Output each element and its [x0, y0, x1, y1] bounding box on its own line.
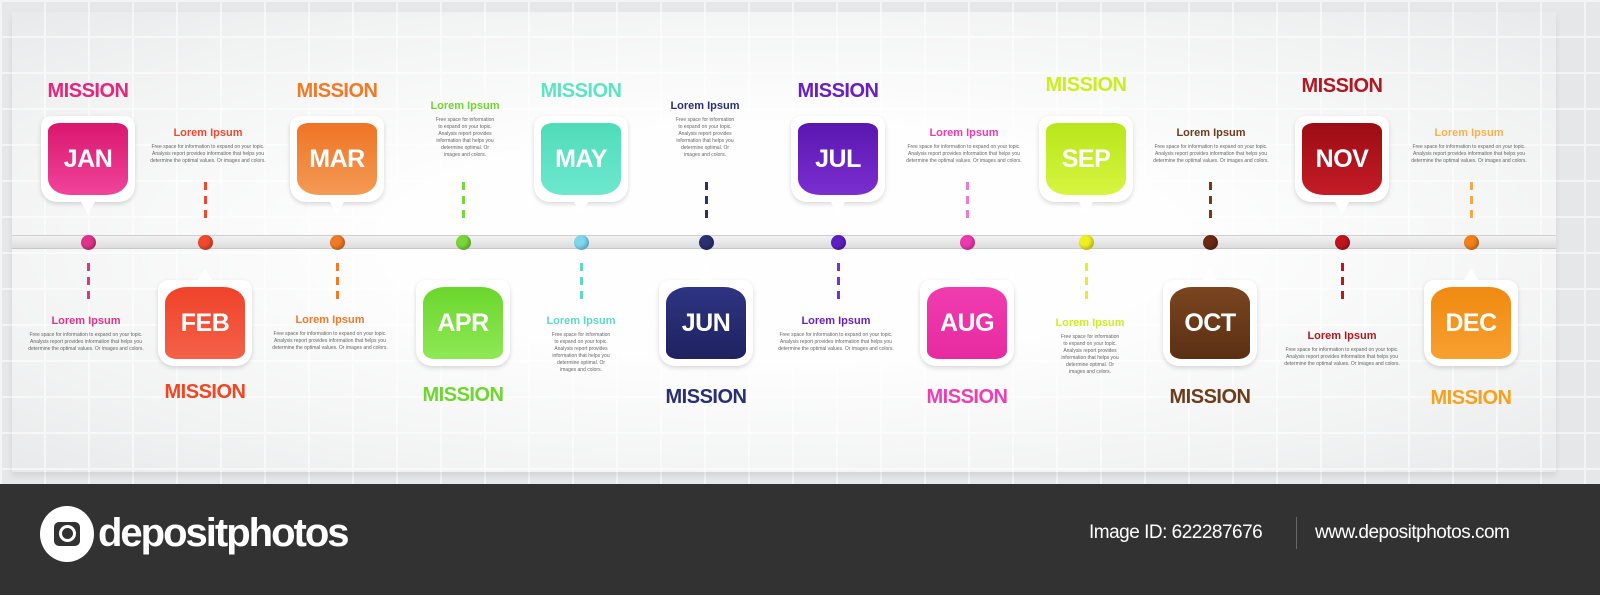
card: OCT: [1163, 280, 1257, 366]
dot: NOV: [1335, 235, 1350, 250]
text: SEP: Lorem Ipsum: [1055, 317, 1125, 329]
heading: MAR mission: MISSION: [297, 80, 377, 102]
dot: DEC: [1464, 235, 1479, 250]
heading: NOV mission: MISSION: [1302, 75, 1382, 97]
dash: JUN: [705, 182, 708, 222]
dot: FEB: [198, 235, 213, 250]
milestone: APR: [414, 284, 512, 406]
card: FEB: [158, 280, 252, 366]
card: OCT: OCT: [1184, 308, 1236, 336]
dot: SEP: [1079, 235, 1094, 250]
card: SEP: SEP: [1062, 144, 1110, 172]
text: AUG: Lorem Ipsum: [929, 127, 999, 139]
text: NOV: [1284, 330, 1400, 367]
milestone: JUN: [658, 284, 754, 408]
card: APR: APR: [437, 308, 489, 336]
text: JUL: [778, 315, 894, 352]
text: JUL: Free space for information to expand on your topic. Analysis report provides information that helps you determine the optimal values. Or images and colors.: [778, 332, 894, 352]
dash: FEB: [204, 182, 207, 222]
text: JUL: Lorem Ipsum: [801, 315, 871, 327]
heading: SEP mission: MISSION: [1046, 74, 1126, 96]
heading: APR mission: MISSION: [423, 384, 503, 406]
text: OCT: [1153, 127, 1269, 164]
card: JAN: JAN: [64, 144, 112, 172]
heading: MAY mission: MISSION: [541, 80, 621, 102]
timeline line: [12, 235, 1556, 249]
dash: JUL: [837, 263, 840, 303]
card: MAY: [534, 116, 628, 202]
milestone: DEC: [1422, 269, 1520, 409]
card: MAR: [290, 116, 384, 202]
text: MAY: Free space for information to expand on your topic. Analysis report provides information that helps you determine optimal. Or images and colors.: [552, 332, 610, 373]
heading: FEB mission: MISSION: [165, 381, 245, 403]
card: APR: [416, 280, 510, 366]
dot: MAR: [330, 235, 345, 250]
dot: APR: [456, 235, 471, 250]
dash: MAR: [336, 263, 339, 303]
text: MAY: Lorem Ipsum: [546, 315, 616, 327]
card: AUG: AUG: [940, 308, 994, 336]
text: SEP: Free space for information to expand on your topic. Analysis report provides information that helps you determine optimal. Or images and colors.: [1061, 334, 1119, 375]
dot: MAY: [574, 235, 589, 250]
text: JUN: [670, 100, 740, 158]
text: NOV: Lorem Ipsum: [1307, 330, 1377, 342]
dash: JAN: [87, 263, 90, 303]
text: AUG: [906, 127, 1022, 164]
dash: SEP: [1085, 263, 1088, 303]
text: FEB: [150, 127, 266, 164]
card: MAR: MAR: [309, 144, 365, 172]
dot: JUN: [699, 235, 714, 250]
text: JAN: Free space for information to expand on your topic. Analysis report provides information that helps you determine the optimal values. Or images and colors.: [28, 332, 144, 352]
text: DEC: Lorem Ipsum: [1434, 127, 1504, 139]
text: APR: [430, 100, 500, 158]
heading: AUG mission: MISSION: [927, 386, 1007, 408]
dot: OCT: [1203, 235, 1218, 250]
card: SEP: [1039, 116, 1133, 202]
dash: AUG: [966, 182, 969, 222]
card: NOV: [1295, 116, 1389, 202]
text: MAR: Free space for information to expand on your topic. Analysis report provides information that helps you determine the optimal values. Or images and colors.: [272, 331, 388, 351]
card: JUL: [791, 116, 885, 202]
dash: OCT: [1209, 182, 1212, 222]
milestone: JUL: [790, 80, 886, 206]
dot: JUL: [831, 235, 846, 250]
dash: DEC: [1470, 182, 1473, 222]
dash: NOV: [1341, 263, 1344, 303]
logo text: depositphotos: [98, 511, 348, 555]
card: AUG: [920, 280, 1014, 366]
card: DEC: DEC: [1445, 308, 1497, 336]
text: JAN: Lorem Ipsum: [51, 315, 121, 327]
heading: JUL mission: MISSION: [798, 80, 878, 102]
text: JUN: Free space for information to expand on your topic. Analysis report provides information that helps you determine optimal. Or images and colors.: [676, 117, 734, 158]
text: MAR: Lorem Ipsum: [295, 314, 365, 326]
dot: JAN: [81, 235, 96, 250]
text: JUN: Lorem Ipsum: [670, 100, 740, 112]
icon: camera: [40, 506, 94, 562]
milestone: NOV: [1294, 75, 1390, 206]
text: FEB: Lorem Ipsum: [173, 127, 243, 139]
card: FEB: FEB: [181, 308, 229, 336]
text: OCT: Lorem Ipsum: [1176, 127, 1246, 139]
card: JUL: JUL: [815, 144, 861, 172]
card: JAN: [41, 116, 135, 202]
text: DEC: [1411, 127, 1527, 164]
text: NOV: Free space for information to expand on your topic. Analysis report provides information that helps you determine the optimal values. Or images and colors.: [1284, 347, 1400, 367]
heading: JAN mission: MISSION: [48, 80, 128, 102]
milestone: MAY: [532, 80, 630, 206]
text: OCT: Free space for information to expand on your topic. Analysis report provides information that helps you determine the optimal values. Or images and colors.: [1153, 144, 1269, 164]
card: JUN: [659, 280, 753, 366]
heading: OCT mission: MISSION: [1170, 386, 1250, 408]
text: AUG: Free space for information to expand on your topic. Analysis report provides information that helps you determine the optimal values. Or images and colors.: [906, 144, 1022, 164]
text: MAR: [272, 314, 388, 351]
text: JAN: [28, 315, 144, 352]
heading: DEC mission: MISSION: [1431, 387, 1511, 409]
text: MAY: [546, 315, 616, 373]
card: JUN: JUN: [682, 308, 730, 336]
card: NOV: NOV: [1316, 144, 1368, 172]
card: DEC: [1424, 280, 1518, 366]
milestone: JAN: [40, 80, 136, 213]
dash: APR: [462, 182, 465, 222]
milestone: MAR: [288, 80, 386, 206]
text: DEC: Free space for information to expand on your topic. Analysis report provides information that helps you determine the optimal values. Or images and colors.: [1411, 144, 1527, 164]
text: SEP: [1055, 317, 1125, 375]
image id: Image ID: 622287676: [1089, 522, 1262, 543]
milestone: OCT: [1162, 284, 1258, 408]
dot: AUG: [960, 235, 975, 250]
footer bar: [0, 484, 1600, 595]
text: APR: Lorem Ipsum: [430, 100, 500, 112]
card: MAY: MAY: [555, 144, 607, 172]
milestone: AUG: [918, 284, 1016, 408]
heading: JUN mission: MISSION: [666, 386, 746, 408]
logo: [40, 506, 348, 562]
dash: MAY: [580, 263, 583, 303]
url: www.depositphotos.com: [1315, 522, 1509, 543]
text: APR: Free space for information to expand on your topic. Analysis report provides information that helps you determine optimal. Or images and colors.: [436, 117, 494, 158]
text: FEB: Free space for information to expand on your topic. Analysis report provides information that helps you determine the optimal values. Or images and colors.: [150, 144, 266, 164]
milestone: SEP: [1038, 74, 1134, 206]
milestone: FEB: [156, 286, 254, 403]
